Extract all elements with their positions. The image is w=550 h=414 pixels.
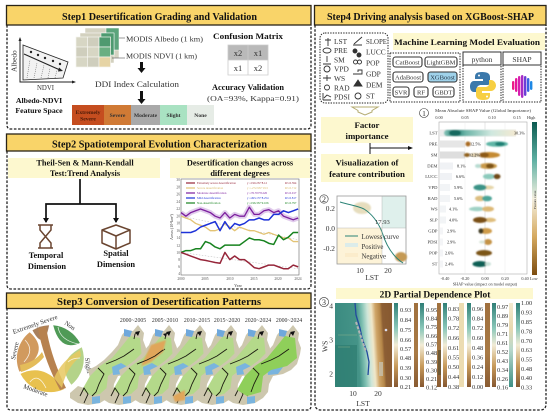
line chart: 16 [176, 229, 180, 233]
SHAP summary chart: 8.1% [457, 164, 466, 168]
colorbars and strips: 0.55 [448, 354, 459, 362]
SHAP summary chart: High [527, 115, 536, 120]
SHAP summary chart: SHAP value (impact on model output) [453, 282, 518, 286]
colorbars and strips: 0.55 [521, 356, 532, 364]
icon: SHAP logo [512, 75, 532, 98]
subheading: ML evaluation [393, 33, 545, 50]
heatmap: 10 [349, 389, 357, 398]
chord labels: Moderate [22, 383, 49, 399]
colorbars and strips: 0.78 [448, 316, 459, 322]
model boxes: XGBoost [430, 74, 455, 82]
subheading: desertification changes: Desertification changes across [187, 158, 294, 168]
line chart: 26 [176, 192, 180, 196]
model boxes: CatBoost [395, 60, 420, 66]
colorbars and strips: 0.48 [400, 355, 411, 362]
heatmap: 20 [374, 389, 382, 398]
arrow: hollow down [352, 107, 378, 115]
colorbars and strips: 0.48 [472, 345, 483, 352]
dependence plot: -0.2 [323, 244, 335, 253]
dependence plot: 0.0 [326, 224, 335, 233]
dependence plot: Lowess curve [362, 234, 399, 241]
text: feature space caption: Albedo-NDVI [16, 96, 62, 105]
confusion matrix: x2 [254, 63, 262, 73]
colorbars and strips: 0.39 [426, 359, 437, 366]
grades legend: None [194, 113, 207, 119]
colorbars and strips: 0.78 [521, 328, 532, 336]
driver factors list: ST [366, 92, 375, 100]
text: spatial dimension: Spatial [103, 249, 129, 258]
line chart: 4 [178, 272, 180, 276]
model boxes: RF [417, 90, 425, 96]
SHAP summary chart: SM [431, 152, 438, 158]
SHAP summary chart: -0.40 [441, 276, 449, 281]
chart: albedo-NDVI feature space: Albedo [10, 50, 18, 72]
SHAP summary chart: POP [429, 250, 438, 256]
dependence plot: Positive [362, 244, 383, 251]
chart: albedo-NDVI feature space [10, 37, 76, 92]
line chart: 2024 [294, 277, 302, 281]
model boxes: GBDT [435, 90, 452, 96]
year labels: 2000~2005 [120, 318, 146, 324]
colorbars and strips: 0.30 [400, 375, 411, 382]
box: factor importance [321, 117, 413, 143]
driver factors list: VPD [334, 64, 349, 74]
line chart: 24 [176, 200, 180, 204]
SHAP summary chart: 0.00 [481, 276, 489, 281]
dependence plot: 17.93 [375, 219, 391, 226]
chord labels: Extremely Severe [12, 314, 59, 336]
line chart: y =190.25t+8.12 [247, 181, 267, 185]
heading: step 1: Step1 Desertification Grading and Validation [62, 12, 257, 23]
SHAP summary chart: 6.6% [456, 174, 465, 179]
SHAP summary chart: LST [429, 130, 438, 136]
marker: 2: 2 [322, 195, 326, 204]
line chart: 8 [178, 258, 180, 262]
SHAP summary chart [425, 108, 538, 286]
driver factors list: SLOPE [366, 37, 387, 46]
driver factors list: PDSI [334, 92, 351, 102]
chart: albedo-NDVI feature space: NDVI [37, 85, 55, 92]
colorbars and strips: 0.60 [472, 335, 483, 342]
driver factors list: DEM [366, 80, 383, 90]
line chart: 18 [176, 222, 180, 226]
confusion matrix: x1 [254, 48, 262, 58]
text: accuracy validation: Accuracy Validation [212, 83, 284, 92]
heatmap: WS [320, 341, 330, 352]
heatmap: 2 [329, 370, 333, 378]
colorbars and strips: 0.70 [521, 338, 532, 345]
SHAP summary chart: 30.3% [514, 130, 525, 136]
model boxes: SVR [395, 90, 408, 96]
chord diagram [17, 325, 84, 392]
bars [439, 122, 527, 274]
line chart: y =76.70t+8.226 [247, 191, 267, 195]
colorbars and strips: 0.89 [497, 313, 508, 320]
dependence plot [323, 196, 407, 282]
SHAP summary chart: 12.5% [470, 142, 481, 146]
SHAP summary chart: PRE [429, 142, 438, 146]
colorbars and strips: 0.00 [472, 384, 483, 391]
SHAP summary chart: 5.6% [454, 196, 463, 201]
line chart: 12 [176, 244, 180, 248]
colorbars and strips: 0.43 [497, 358, 508, 365]
subheading: desertification changes: different degrees [210, 169, 270, 178]
text: accuracy values: (OA=93%, Kappa=0.91) [207, 94, 299, 103]
colorbars and strips: 0.52 [497, 349, 508, 356]
colorbars and strips [394, 300, 532, 392]
SHAP summary chart: 4.1% [449, 206, 458, 212]
colorbars and strips: 0.63 [521, 347, 532, 354]
colorbars and strips: 0.50 [448, 364, 459, 371]
SHAP summary chart: 0.10 [488, 115, 496, 120]
colorbars and strips: 0.97 [497, 304, 509, 311]
confusion matrix: x1 [234, 63, 242, 73]
SHAP summary chart: 12.2% [469, 152, 480, 158]
colorbars and strips: 0.75 [400, 327, 411, 334]
heatmap: 4 [329, 302, 333, 310]
colorbars and strips: 0.40 [521, 375, 532, 382]
year labels: 2000~2024 [276, 318, 302, 324]
marker: 1: 1 [422, 109, 426, 118]
model boxes [390, 53, 460, 102]
SHAP summary chart: Mean Absolute SHAP Value (Global Importance) [435, 108, 532, 113]
colorbars and strips: 0.93 [521, 310, 532, 316]
maps: period 2 [101, 325, 177, 405]
colorbars and strips: 0.95 [426, 307, 437, 314]
colorbars and strips: 0.66 [400, 337, 411, 344]
box: factor importance: importance [346, 131, 389, 141]
line chart: 10 [176, 251, 180, 255]
chord labels: Severe [10, 341, 21, 360]
heading: step 3: Step3 Conversion of Desertification Patterns [57, 297, 261, 308]
driver factors list: PRE [334, 46, 348, 55]
colorbars and strips: 0.71 [497, 331, 508, 338]
SHAP summary chart: 2.9% [447, 228, 456, 234]
line chart: Moderate desertification [197, 191, 227, 195]
colorbars and strips: 0.38 [448, 384, 459, 391]
panel: step 1 [6, 6, 311, 129]
dependence plot: Negative [362, 254, 386, 260]
colorbars and strips: 0.30 [426, 368, 437, 374]
line chart: Extremely severe desertification [197, 181, 236, 185]
year labels: 2020~2024 [245, 318, 271, 324]
text: DDI: DDI Index Calculation [95, 79, 180, 89]
SHAP box: SHAP [512, 55, 532, 64]
SHAP summary chart: WS [431, 206, 438, 212]
python box [463, 52, 501, 102]
colorbars and strips: 0.79 [497, 322, 508, 329]
SHAP summary chart: SLP [430, 218, 438, 222]
chord labels: Non [63, 320, 77, 333]
driver factors list: LST [334, 37, 348, 46]
line chart: Areas (10⁴km²) [169, 214, 174, 240]
arrow: to grades [138, 91, 146, 104]
line chart: 2015 [250, 277, 258, 281]
colorbar [530, 122, 538, 281]
colorbars and strips: 0.26 [497, 376, 508, 383]
dependence plot: 20 [384, 266, 392, 275]
subheading: trend analysis: Theil-Sen & Mann-Kendall [36, 158, 134, 168]
colorbars and strips: 0.93 [400, 307, 411, 314]
line chart: 14 [176, 236, 180, 240]
year labels: 2005~2010 [152, 318, 178, 324]
colorbars and strips: 0.66 [426, 333, 437, 340]
line chart: 2000 [177, 277, 185, 281]
line chart: 28 [176, 186, 180, 190]
text: feature space caption: Feature Space [15, 106, 63, 115]
colorbars and strips: 0.36 [472, 354, 483, 362]
grades legend: Moderate [134, 113, 158, 119]
heading: step 4: Step4 Driving analysis based on XGBoost-SHAP [327, 12, 535, 23]
line chart: y =493.17t+8.254 [247, 196, 269, 200]
heatmap: 3 [329, 336, 333, 344]
line chart: 30 [176, 178, 180, 182]
line chart: 2020 [274, 277, 282, 281]
colorbars and strips: 0.48 [521, 366, 532, 373]
icon: MODIS raster stacks [76, 28, 125, 67]
dependence plot: 0.2 [326, 204, 335, 213]
panel: step 3 [6, 293, 311, 410]
colorbars and strips: 0.61 [497, 340, 508, 347]
text: MODIS Albedo: MODIS Albedo (1 km) [126, 34, 204, 44]
driver factors list: WS [334, 74, 345, 83]
colorbars and strips: 0.48 [426, 350, 437, 357]
heading: step 4 [314, 6, 546, 25]
colorbars and strips: 0.34 [497, 367, 509, 374]
heatmap [320, 302, 392, 408]
driver factors list: LUCC [366, 48, 386, 56]
text: MODIS NDVI: MODIS NDVI (1 km) [126, 52, 198, 60]
line chart: R²=0.594 [285, 181, 297, 185]
line chart: R²=0.817 [285, 196, 297, 200]
heading: step 1 [6, 6, 311, 25]
box: visualization: Visualiazation of [336, 158, 400, 168]
chord labels: Slight [83, 357, 92, 374]
colorbars and strips: 0.61 [448, 345, 459, 352]
line chart: Mild desertification [197, 196, 221, 200]
subheading: desertification changes [170, 158, 310, 178]
colorbars and strips: 0.96 [472, 306, 483, 313]
colorbars and strips: 0.57 [426, 342, 438, 348]
colorbars and strips: 0.21 [400, 384, 411, 391]
line chart: R²=0.017 [285, 191, 297, 195]
line chart: y =196.35t+9.106 [247, 201, 269, 205]
SHAP summary chart: 0.40 [521, 276, 529, 281]
grades legend: Slight [166, 113, 181, 119]
dependence plot: LST [365, 273, 379, 282]
arrow: to SHAP chart [370, 143, 413, 154]
line chart: 2010 [226, 277, 234, 281]
subheading: ML evaluation: Machine Learning Model Evaluation [394, 37, 540, 47]
line chart: R²=0.712 [285, 186, 297, 190]
SHAP summary chart: LUCC [425, 174, 438, 179]
colorbars and strips: 0.84 [400, 317, 412, 324]
colorbars and strips: 0.16 [497, 384, 508, 392]
marker: 3: 3 [322, 298, 326, 307]
colorbars and strips: 0.84 [426, 316, 438, 322]
colorbars and strips: 0.44 [448, 374, 460, 381]
maps: period 6 [225, 325, 301, 405]
colorbars and strips: 0.75 [426, 324, 437, 331]
text: confusion matrix: Confusion Matrix [213, 32, 284, 41]
swarm points [444, 130, 517, 267]
maps: period 4 [163, 325, 239, 405]
colorbar: Feature value [533, 190, 537, 209]
colorbars and strips: 1.00 [521, 300, 532, 307]
SHAP summary chart: -0.20 [461, 276, 469, 281]
driver factors list: POP [366, 58, 380, 68]
SHAP box [503, 52, 541, 102]
icon: hourglass [38, 225, 53, 248]
marker: 3 [319, 297, 329, 307]
subheading: 2D PDP: 2D Partial Dependence Plot [380, 290, 491, 300]
driver factors list [320, 33, 388, 103]
icon: python logo [470, 72, 496, 100]
subheading: 2D PDP [336, 288, 533, 300]
panel: step 2 [6, 134, 311, 289]
box: visualization [321, 154, 413, 182]
grades legend: Severe [110, 113, 126, 119]
colorbars and strips: 0.12 [472, 374, 483, 381]
box: factor importance: Factor [355, 120, 380, 130]
driver factors list: GDP [366, 70, 381, 78]
marker: 2 [320, 195, 328, 204]
year labels: 2015~2020 [214, 318, 240, 324]
colorbars and strips: 0.33 [521, 384, 532, 392]
heading: step 2 [6, 134, 311, 151]
line chart: Year [234, 283, 242, 288]
colorbars and strips: 0.72 [472, 325, 483, 332]
SHAP summary chart: 0.05 [461, 115, 469, 120]
year labels: 2010~2015 [184, 318, 210, 324]
subheading: trend analysis [8, 158, 160, 178]
SHAP summary chart: 2.6% [445, 250, 454, 256]
arrow tree [43, 179, 119, 223]
SHAP summary chart: 0.15 [513, 115, 521, 120]
text: temporal dimension: Dimension [28, 262, 66, 271]
box: visualization: feature contribution [329, 169, 405, 179]
text: temporal dimension: Temporal [29, 251, 64, 260]
colorbars and strips: 0.85 [521, 319, 532, 326]
panel: step 4 [314, 6, 546, 410]
subheading: trend analysis: Test:Trend Analysis [50, 169, 121, 178]
SHAP summary chart: 0.20 [501, 276, 509, 281]
heading: step 3 [6, 293, 311, 308]
SHAP summary chart: RAD [428, 196, 438, 201]
line chart: 20 [176, 214, 180, 218]
SHAP summary chart: GDP [428, 228, 438, 234]
SHAP summary chart: 0.00 [435, 115, 443, 120]
confusion matrix [228, 45, 268, 75]
SHAP summary chart: ST [432, 262, 438, 266]
text: spatial dimension: Dimension [97, 260, 135, 269]
SHAP summary chart: 2.4% [445, 262, 454, 266]
icon: cube [102, 225, 130, 249]
marker: 1 [420, 108, 428, 118]
maps: period 5 [194, 325, 270, 405]
colorbars and strips: 0.72 [448, 325, 459, 332]
colorbars and strips: 0.21 [426, 376, 437, 383]
confusion matrix: x2 [234, 48, 242, 58]
driver factors list: SM [334, 56, 345, 64]
grades legend [72, 105, 214, 125]
line chart: Non-desertification [197, 201, 221, 205]
line chart: y =-272.93t+19.5 [247, 186, 268, 190]
colorbars and strips: 0.66 [448, 335, 459, 342]
SHAP summary chart: DEM [427, 164, 438, 168]
line chart: Severe desertification [197, 186, 224, 190]
maps: period 3 [132, 325, 208, 405]
colorbars and strips: 0.12 [426, 384, 437, 392]
python box: python [472, 55, 493, 64]
SHAP summary chart: VPD [428, 185, 438, 190]
grades legend: Extremely [76, 110, 101, 116]
SHAP summary chart: 5.9% [454, 185, 463, 190]
heatmap: LST [356, 399, 370, 408]
colorbars and strips: 0.84 [472, 316, 484, 322]
model boxes: AdaBoost [395, 74, 421, 82]
grades legend: Severe [80, 116, 96, 122]
colorbars and strips: 0.24 [472, 364, 484, 371]
line chart: 22 [176, 207, 180, 211]
model boxes: LightGBM [427, 60, 456, 66]
SHAP summary chart: 2.9% [447, 240, 456, 244]
colorbars and strips: 0.57 [400, 346, 412, 353]
chord labels [10, 314, 92, 399]
maps: period 1 [70, 325, 146, 405]
colorbars and strips: 0.83 [448, 306, 459, 313]
SHAP summary chart: PDSI [428, 240, 438, 244]
colorbar: Low [530, 276, 538, 281]
arrow: to DDI [138, 62, 146, 73]
heading: step 2: Step2 Spatiotemporal Evolution Characterization [52, 140, 267, 150]
dependence plot: 10 [356, 266, 364, 275]
SHAP summary chart: 4.0% [449, 218, 458, 222]
colorbars and strips: 0.39 [400, 365, 411, 372]
line chart: R²=0.797 [285, 201, 297, 205]
line chart: 2005 [201, 277, 209, 281]
driver factors list: RAD [334, 84, 350, 92]
line chart [169, 178, 302, 288]
line chart: 6 [178, 265, 180, 269]
year labels [120, 318, 302, 324]
